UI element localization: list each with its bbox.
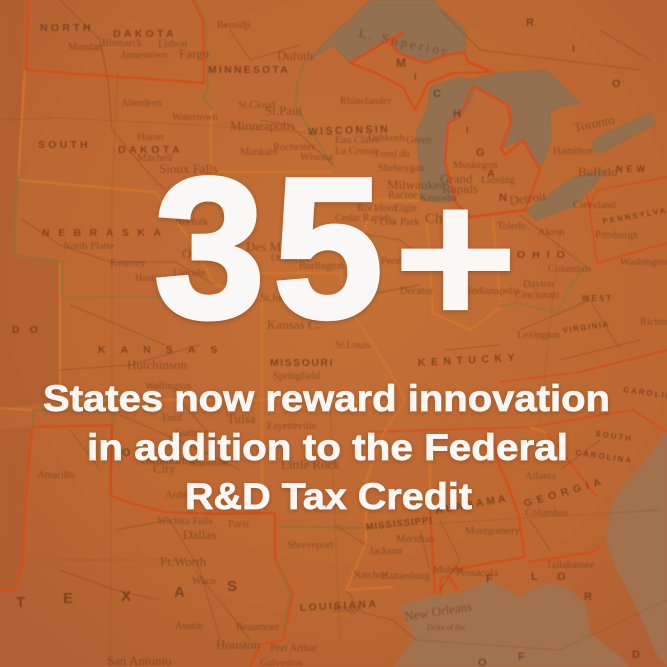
Lake Michigan bbox=[416, 77, 476, 203]
town labels: Des Moines bbox=[246, 239, 308, 254]
large state labels: S bbox=[227, 578, 237, 595]
town labels: Springfield bbox=[273, 371, 321, 382]
large state labels: O bbox=[122, 447, 131, 459]
town labels: Eau Claire bbox=[335, 135, 380, 146]
town labels: Columbus bbox=[548, 264, 591, 275]
large state labels: E bbox=[63, 590, 73, 607]
large state labels: I bbox=[414, 72, 417, 82]
large state labels: A bbox=[174, 584, 185, 601]
town labels: Houston bbox=[216, 637, 261, 652]
town labels: Lansing bbox=[481, 175, 516, 186]
town labels: Delta of the bbox=[427, 623, 465, 632]
large state labels: VIRGINIA bbox=[562, 319, 610, 335]
large state labels: T bbox=[16, 594, 25, 611]
town labels: Kansas C. bbox=[267, 317, 320, 332]
large state labels: LOUISIANA bbox=[300, 598, 379, 614]
town labels: Watertown bbox=[172, 112, 219, 123]
town labels: Sheboygan bbox=[378, 163, 425, 174]
large state labels: NEW bbox=[616, 164, 649, 174]
town labels: North Platte bbox=[63, 241, 114, 252]
town labels: St.Louis bbox=[335, 340, 370, 351]
town labels: Burlington bbox=[299, 261, 345, 272]
town labels: Wellington bbox=[145, 381, 192, 392]
large state labels: NEBRASKA bbox=[42, 227, 170, 239]
digit 5: 5 bbox=[273, 137, 383, 360]
large state labels: OHIO bbox=[517, 249, 572, 261]
caption bbox=[43, 378, 610, 517]
digit 3: 3 bbox=[154, 137, 265, 360]
large state labels: KANSAS bbox=[98, 344, 232, 356]
town labels: Elgin bbox=[394, 203, 417, 214]
plus sign: + bbox=[393, 148, 518, 367]
town labels: Hutchinson bbox=[127, 357, 187, 372]
town labels: Hattiesburg bbox=[381, 571, 431, 582]
town labels: Sioux Falls bbox=[159, 161, 218, 176]
town labels: Fond du bbox=[375, 149, 410, 160]
lakes bbox=[309, 0, 656, 220]
town labels: Oshkosh bbox=[368, 133, 406, 144]
town labels: Dallas bbox=[183, 527, 216, 542]
town labels: Chi bbox=[425, 211, 447, 227]
town labels: Rapids bbox=[442, 181, 478, 196]
town labels: Rouge bbox=[333, 604, 361, 615]
town labels: Bemidji bbox=[217, 20, 251, 31]
large state labels: I bbox=[466, 125, 469, 135]
large state labels: F bbox=[486, 573, 493, 585]
large state labels: A bbox=[487, 168, 495, 180]
town labels: Huron bbox=[137, 132, 165, 143]
town labels: Dayton bbox=[523, 279, 555, 290]
town labels: Beaumont bbox=[236, 622, 279, 633]
town labels: Cleveland bbox=[573, 200, 616, 211]
town labels: Aberdeen bbox=[121, 98, 163, 109]
town labels: Pensacola bbox=[456, 568, 498, 579]
town labels: Buffalo bbox=[578, 164, 617, 179]
town labels: L. Superior bbox=[357, 25, 451, 59]
town labels: Mankato bbox=[240, 147, 277, 158]
town labels: Rochester bbox=[273, 142, 315, 153]
large state labels: GEORGIA bbox=[523, 475, 607, 510]
Lake Huron bbox=[473, 70, 581, 167]
town labels: St.Paul bbox=[265, 103, 303, 118]
town labels: Enid bbox=[162, 413, 183, 424]
town labels: Columbus bbox=[525, 508, 568, 519]
town labels: Cedar Rapids bbox=[335, 213, 392, 224]
caption line 3: R&D Tax Credit bbox=[185, 476, 472, 517]
town labels: Pittsburgh bbox=[595, 230, 639, 241]
town labels: Atlanta bbox=[525, 471, 556, 482]
Lake Ontario bbox=[593, 113, 656, 152]
town labels: Omaha bbox=[182, 246, 220, 261]
Gulf of Mexico bbox=[393, 580, 630, 667]
town labels: Cincinnati bbox=[515, 290, 559, 301]
large state labels: O bbox=[612, 78, 621, 90]
town labels: Tulsa bbox=[227, 411, 256, 426]
town labels: Grand bbox=[440, 171, 473, 186]
large state labels: R bbox=[526, 17, 534, 29]
town labels: Ft.Worth bbox=[160, 554, 207, 569]
large state labels: SOUTH bbox=[595, 429, 634, 443]
town labels: Austin bbox=[175, 621, 204, 632]
town labels: Bismarck bbox=[102, 38, 143, 49]
large state labels: CAROLINA bbox=[575, 448, 634, 465]
town labels: Jackson bbox=[369, 546, 403, 557]
large state labels: H bbox=[453, 108, 461, 120]
town labels: Kearney bbox=[110, 258, 146, 269]
town labels: Shreveport bbox=[287, 540, 333, 551]
caption line 2: in addition to the Federal bbox=[87, 427, 568, 468]
town labels: New Orleans bbox=[403, 598, 473, 624]
town labels: Lincoln bbox=[173, 268, 206, 279]
town labels: Mandan bbox=[68, 42, 103, 53]
large state labels: L bbox=[531, 571, 538, 583]
large state labels: G bbox=[476, 147, 485, 159]
town labels: Akron bbox=[538, 227, 566, 238]
town labels: Waco bbox=[192, 576, 216, 587]
town labels: Hamilton bbox=[553, 146, 593, 157]
large state labels: I bbox=[572, 44, 575, 55]
town labels: St.Joseph bbox=[260, 293, 301, 304]
town labels: Meridian bbox=[396, 534, 435, 545]
Atlantic Ocean bbox=[606, 430, 667, 667]
town labels: City bbox=[153, 461, 176, 476]
town labels: Hastings bbox=[135, 273, 172, 284]
large state labels: MINNESOTA bbox=[208, 64, 290, 76]
town labels: Rockford bbox=[357, 203, 397, 214]
town labels: Oak Park bbox=[380, 217, 420, 228]
town labels: Minneapolis bbox=[230, 118, 295, 133]
town labels: Lisbon bbox=[158, 39, 188, 50]
town labels: Norfolk bbox=[175, 217, 209, 228]
town labels: Detroit bbox=[508, 188, 547, 208]
town labels: Wichita Falls bbox=[157, 516, 213, 527]
caption line 1: States now reward innovation bbox=[43, 378, 610, 419]
town labels: Rhinelander bbox=[340, 96, 392, 107]
town labels: Paris bbox=[228, 519, 249, 530]
town labels: Duluth bbox=[277, 48, 314, 63]
large state labels: F bbox=[518, 651, 525, 663]
town labels: Winona bbox=[300, 152, 333, 163]
town labels: Jamestown bbox=[121, 50, 168, 61]
town labels: Amarillo bbox=[37, 470, 75, 481]
town labels: Racine bbox=[388, 190, 417, 201]
large state labels: R bbox=[584, 591, 592, 603]
large state labels: DO bbox=[12, 324, 48, 336]
seas bbox=[393, 430, 667, 667]
Lake Superior bbox=[309, 0, 466, 63]
town labels: Shawnee bbox=[190, 458, 228, 469]
large state labels: X bbox=[121, 588, 131, 605]
large state labels: KENTUCKY bbox=[418, 352, 520, 369]
headline number bbox=[154, 137, 518, 367]
large state labels: NORTH bbox=[40, 22, 94, 34]
large state labels: N bbox=[499, 192, 507, 204]
town labels: Peoria bbox=[381, 256, 408, 267]
large state labels: C bbox=[433, 88, 441, 100]
town labels: Guthrie bbox=[175, 428, 207, 439]
orange borders bbox=[0, 70, 588, 590]
large state labels: WEST bbox=[582, 294, 613, 303]
town labels: Muskegon bbox=[453, 160, 498, 171]
town labels: Tallahassee bbox=[546, 560, 595, 571]
town labels: St.Cloud bbox=[238, 100, 276, 111]
town labels: La Crosse bbox=[335, 146, 378, 157]
large state labels: A bbox=[283, 451, 290, 462]
town labels: Fayetteville bbox=[267, 421, 317, 432]
town labels: Toledo bbox=[497, 221, 526, 232]
town labels: Little Rock bbox=[281, 457, 340, 472]
large state labels: MISSISSIPPI bbox=[365, 515, 433, 533]
large state labels: ALABAMA bbox=[434, 492, 509, 517]
town labels: Mobile bbox=[433, 565, 464, 576]
town labels: Oklahoma bbox=[140, 452, 194, 467]
large state labels: M bbox=[396, 56, 406, 70]
town labels: Lexington bbox=[517, 330, 561, 341]
town labels: Milwaukee bbox=[387, 177, 446, 192]
town labels: Green bbox=[406, 135, 432, 146]
town labels: Indianapolis bbox=[468, 286, 520, 297]
town labels: Fargo bbox=[179, 46, 209, 61]
large state labels: WISCONSIN bbox=[308, 123, 390, 138]
town labels: Ardmore bbox=[165, 490, 203, 501]
large state labels: SOUTH bbox=[38, 139, 91, 151]
large state labels: D bbox=[632, 649, 640, 661]
town labels: Natchez bbox=[353, 570, 388, 581]
Lake Erie bbox=[526, 170, 606, 220]
large state labels: O bbox=[557, 571, 566, 583]
large state labels: DAKOTA bbox=[118, 144, 183, 156]
town labels: Ottumwa bbox=[271, 253, 310, 264]
large state labels: DAKOTA bbox=[113, 28, 177, 40]
town labels: Port Arthur bbox=[270, 643, 318, 654]
town labels: Mitchell bbox=[137, 153, 173, 164]
town labels: Toronto bbox=[573, 112, 616, 135]
town labels: Montgomery bbox=[465, 526, 521, 537]
town labels: Decatur bbox=[400, 286, 434, 297]
town labels: Kenosha bbox=[420, 193, 457, 204]
large state labels: MISSOURI bbox=[270, 357, 334, 369]
